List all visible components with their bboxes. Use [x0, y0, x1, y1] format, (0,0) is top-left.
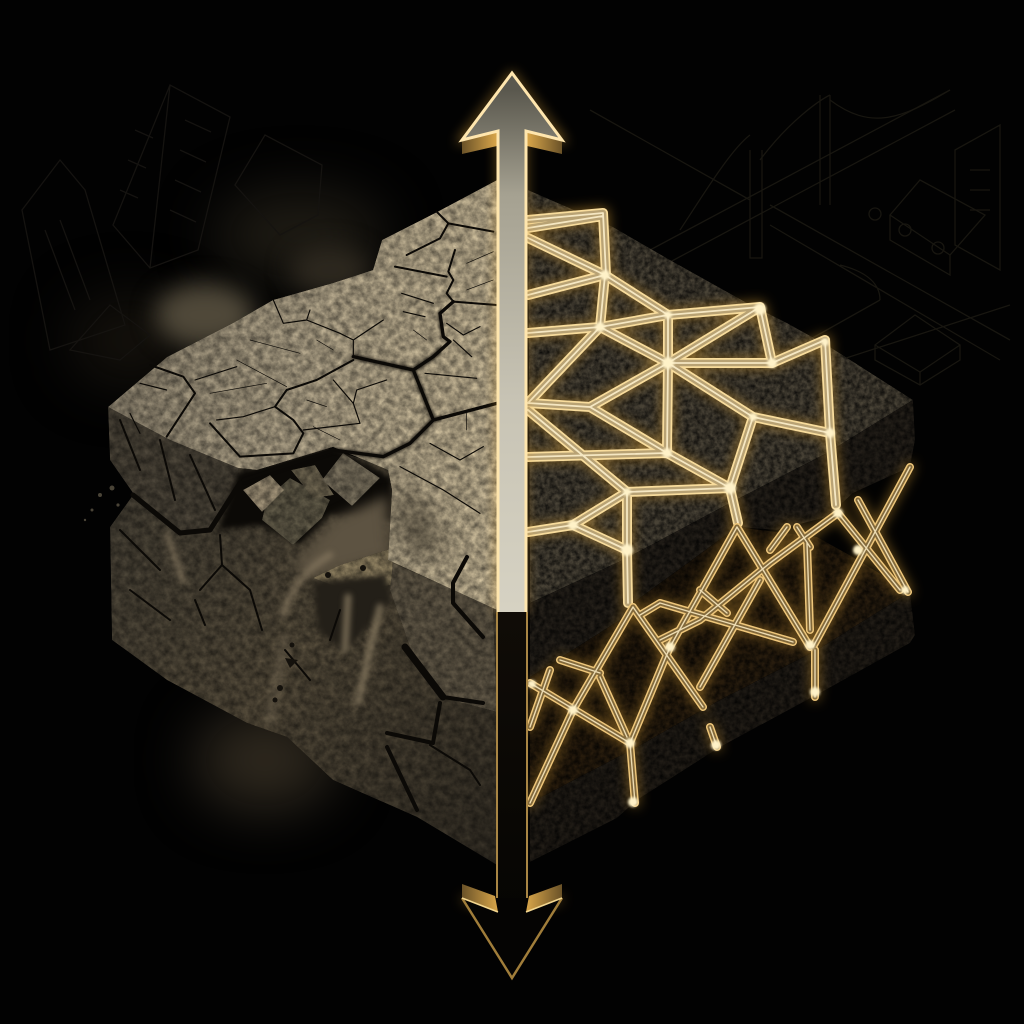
sand-covered ledge	[313, 548, 393, 590]
shaded patch on top face	[395, 478, 445, 560]
lower plate glow	[462, 898, 562, 912]
arrow glow	[462, 75, 562, 612]
upper strut highlight	[528, 213, 836, 603]
up arrowhead outline	[462, 73, 562, 612]
lower slab front face	[110, 440, 497, 865]
upper strut interior	[528, 213, 836, 603]
upper outer glow	[528, 213, 836, 603]
dust streaks	[167, 535, 380, 720]
upper slab top face	[528, 190, 913, 603]
cracked top face	[108, 180, 497, 610]
upper strut edge	[528, 213, 836, 603]
glowing nodes	[528, 270, 909, 807]
down arrowhead	[462, 898, 562, 978]
lower shaft edges	[497, 612, 527, 912]
lower shaft	[498, 612, 526, 912]
soil block: reinforced right half	[528, 190, 915, 862]
upper slab side face	[530, 400, 915, 677]
dark void under the ledge	[218, 447, 392, 545]
right front wedge	[390, 563, 497, 712]
up arrowhead with shaft	[462, 73, 562, 612]
down arrowhead right plate	[526, 884, 562, 912]
glowing lattice	[528, 213, 910, 807]
soil block: cracked left half	[84, 180, 497, 865]
lower strut edge	[530, 467, 910, 803]
lower face cracks	[120, 420, 483, 810]
sand slump	[292, 495, 390, 577]
upper left front face	[108, 407, 240, 533]
line art: right bridge, road and buildings	[590, 90, 1010, 385]
lower outer glow	[530, 467, 910, 803]
lower strut highlight	[530, 467, 910, 803]
fallen chunks	[243, 453, 380, 545]
down arrowhead left plate	[462, 884, 498, 912]
lower strut interior	[530, 467, 910, 803]
dust cloud: upper left	[70, 190, 385, 385]
line art: left buildings	[22, 85, 322, 360]
lower slab front face	[530, 592, 915, 862]
dust cloud: lower left	[195, 710, 335, 810]
crack shadow	[243, 302, 497, 480]
up arrowhead right plate	[527, 131, 562, 154]
crack network	[130, 212, 497, 513]
down arrowhead plate edge	[462, 898, 562, 912]
up arrowhead left plate	[462, 131, 497, 154]
falling rock fragments	[272, 565, 366, 702]
lower slab top face	[530, 527, 910, 803]
flying particles	[84, 486, 120, 521]
shadowed block below ledge	[313, 575, 392, 652]
central double arrow	[462, 73, 562, 978]
